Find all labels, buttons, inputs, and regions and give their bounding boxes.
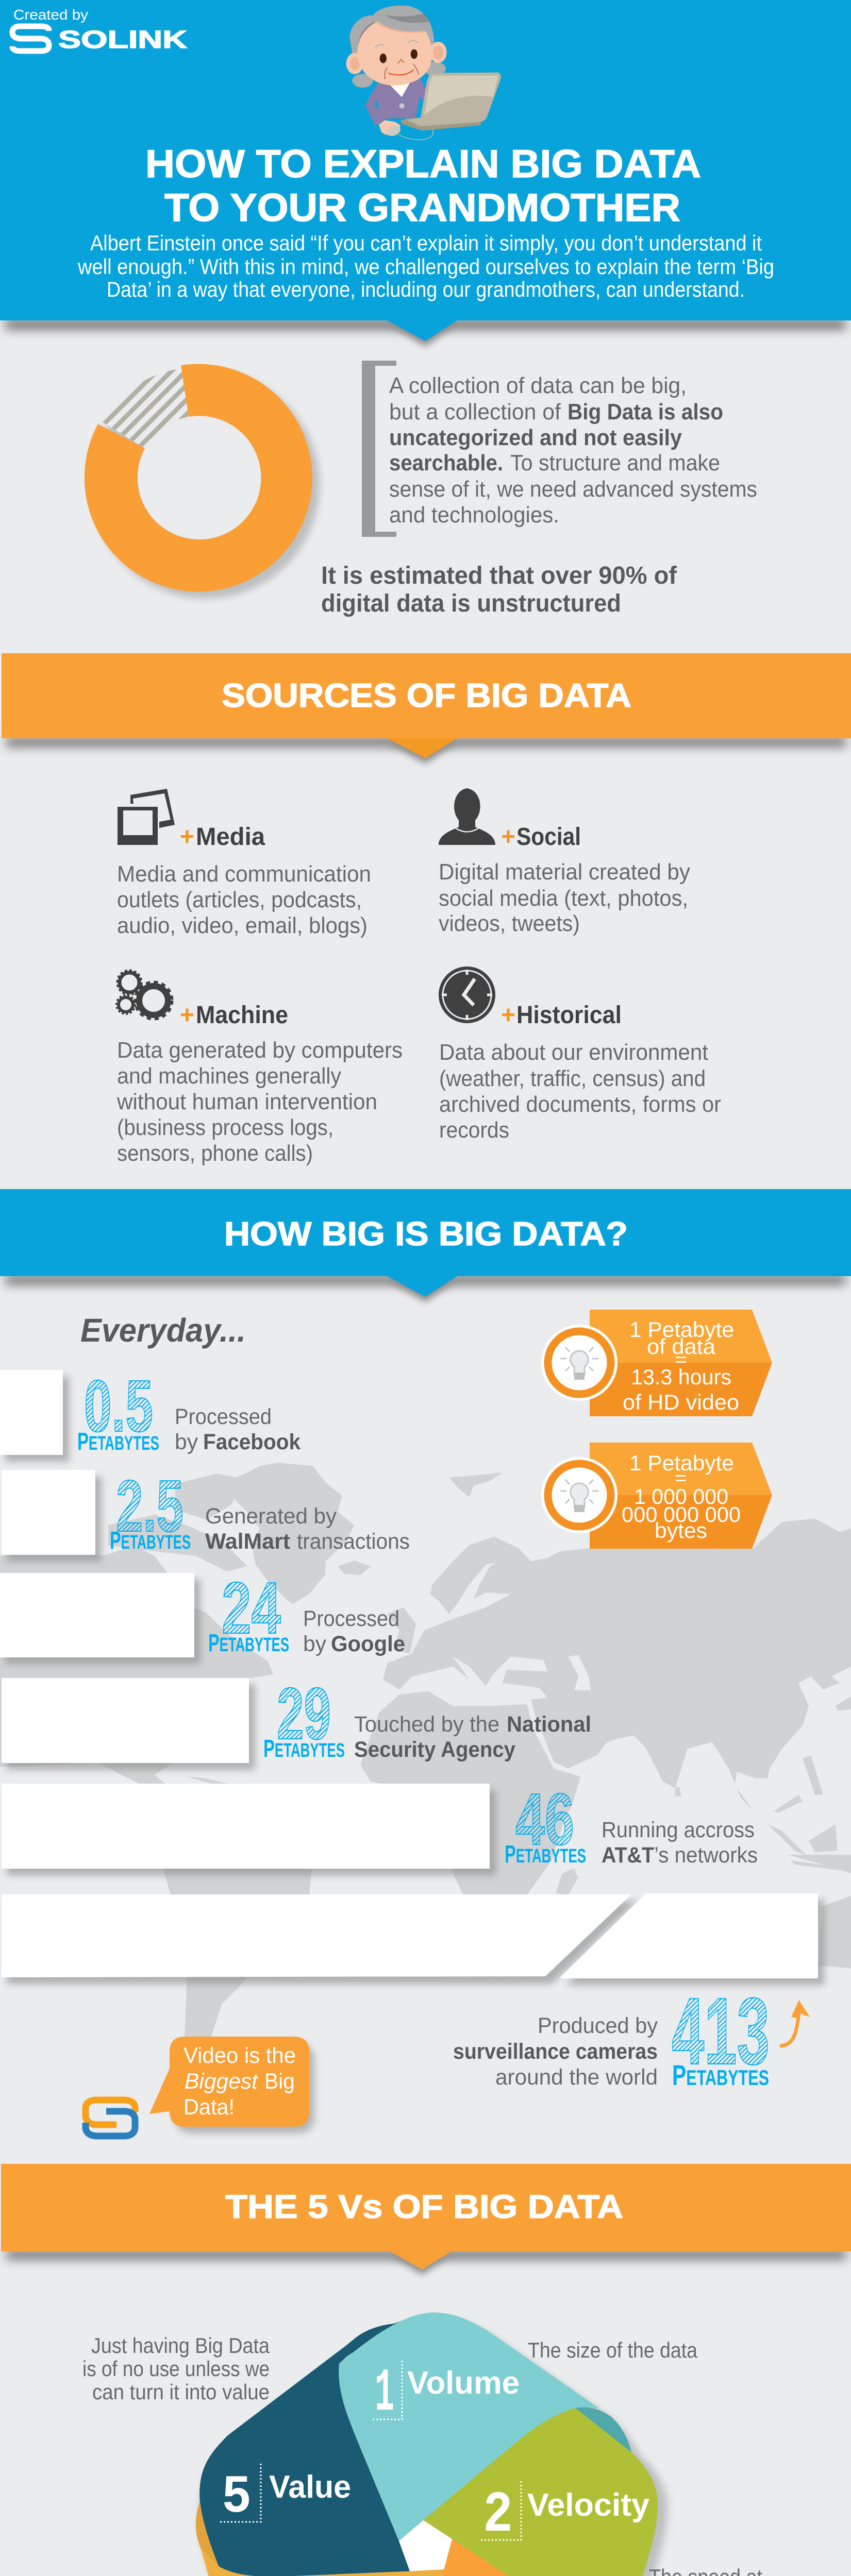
bar: facebook [0,1370,69,1462]
panel: historical [439,967,721,1143]
panel: social [439,788,690,936]
callout: 1 petabyte of data: = [675,1349,687,1370]
heading: historical: + [501,1002,515,1029]
text: nsa [354,1712,591,1762]
callout: video is the biggest big data [149,2037,314,2133]
heading: everyday: Everyday... [80,1312,246,1349]
label: 5 value [220,2464,351,2528]
stat: 413 petabytes [672,1978,770,2091]
text: surveillance cameras: Produced by [538,2013,658,2038]
callout: 1 petabyte of data: 13.3 hours [631,1365,731,1389]
stat: 29 petabytes: 29 [277,1673,331,1755]
panel: sources band [2,653,851,764]
panel: media [117,789,371,938]
text: walmart: transactions [297,1529,410,1554]
text: 90% estimate: digital data is unstructured [321,590,621,617]
stat: 24 petabytes: PETABYTES [208,1630,289,1657]
text: google: Google [331,1632,405,1656]
text: collection of data: searchable. [389,450,503,476]
text: collection of data [389,373,757,528]
icon: light bulb [541,1325,618,1401]
callout: 1 petabyte in bytes: 000 000 000 [622,1502,741,1527]
world map [0,1463,851,2037]
callout: 1 petabyte of data: of HD video [623,1390,739,1414]
callout: video is the biggest big data: Video is the [183,2043,296,2068]
stat: 0.5 petabytes: PETABYTES [77,1428,159,1455]
heading: social: Social [516,823,581,851]
text: machine description: (business process logs, [117,1115,333,1140]
text: nsa: National [507,1712,591,1737]
heading: historical: Historical [516,1002,622,1029]
title: TO YOUR GRANDMOTHER [164,186,680,230]
label: 1 volume: 1 [375,2360,394,2428]
icon: person [439,788,495,845]
text: at&t: AT&T [602,1843,654,1868]
label: 2 velocity: Velocity [527,2487,650,2523]
bar: walmart [2,1470,102,1562]
intro text [77,231,774,301]
text: walmart: WalMart [205,1529,290,1554]
callout: 1 petabyte in bytes [541,1443,772,1549]
label: 5 value: Value [269,2469,351,2505]
text: facebook: by [175,1430,198,1454]
stat: 2.5 petabytes: PETABYTES [110,1527,191,1554]
text: collection of data: Big Data is also [568,399,723,425]
text: google: by [303,1632,326,1656]
text: collection of data: To structure and make [510,450,720,476]
callout: 1 petabyte in bytes: 1 000 000 [634,1484,728,1509]
text: social description: Digital material created by [439,859,690,885]
stat: 0.5 petabytes [77,1365,159,1455]
title [145,142,701,230]
text: machine description: Data generated by computers [117,1038,403,1063]
label: 2 velocity: 2 [483,2483,513,2548]
intro text: well enough.” With this in mind, we challenged ourselves to explain the term ‘Big [77,255,774,279]
text: historical description: archived documents, forms or [439,1092,721,1117]
stat: 24 petabytes [208,1567,289,1657]
text: social description: social media (text, photos, [439,886,688,911]
text: media description: outlets (articles, podcasts, [117,887,362,912]
intro text: Data’ in a way that everyone, including our grandmothers, can understand. [107,277,745,301]
text: google: Processed [303,1606,399,1631]
heading: machine: Machine [196,1002,288,1029]
text: at&t: Running accross [602,1818,755,1842]
logo: Solink: SOLINK [58,26,187,54]
text: collection of data: but a collection of [389,399,561,425]
stat: 413 petabytes: PETABYTES [672,2059,769,2091]
callout: 1 petabyte in bytes: = [675,1467,687,1488]
bar: national security agency [2,1678,255,1770]
text: machine description: and machines generally [117,1063,341,1089]
text: media description: audio, video, email, blogs) [117,913,368,938]
text: google [303,1606,405,1656]
text: collection of data: uncategorized and not easily [389,425,682,450]
text: historical description: Data about our environment [439,1040,708,1065]
callout: video is the biggest big data: Data! [183,2095,235,2120]
stat: 413 petabytes: 413 [672,1978,770,2084]
text: volume description: The size of the data [528,2338,698,2362]
text: historical description: records [439,1117,509,1143]
stat: 46 petabytes: PETABYTES [505,1841,586,1868]
heading: machine: + [180,1002,194,1029]
panel: machine [116,971,403,1166]
stat: 29 petabytes: PETABYTES [263,1735,345,1762]
text: value description: can turn it into value [92,2380,270,2404]
segment: veracity [201,2549,444,2576]
text: nsa: Touched by the [354,1712,499,1737]
donut chart: 90% unstructured [85,364,320,599]
panel: 5 Vs band [1,2164,851,2275]
panel: sources band: SOURCES OF BIG DATA [222,676,631,714]
segment: variety [347,2539,601,2576]
label: 1 volume [371,2360,520,2428]
intro text: Albert Einstein once said “If you can’t explain it simply, you don’t understand it [90,231,762,255]
text: social description [439,859,690,936]
text: surveillance cameras [453,2013,658,2090]
segment: volume [339,2312,600,2541]
text: machine description: sensors, phone calls) [117,1141,313,1166]
text: at&t: ’s networks [654,1843,758,1868]
label: 5 value: 5 [222,2467,252,2528]
text: media description: Media and communication [117,861,371,887]
callout: 1 petabyte of data [541,1310,772,1416]
text: collection of data: and technologies. [389,502,559,528]
icon: clock [439,967,495,1023]
title: HOW TO EXPLAIN BIG DATA [145,142,701,186]
text: value description: Just having Big Data [91,2333,270,2358]
arrow: upward growth [780,2000,810,2046]
stat: 2.5 petabytes: 2.5 [116,1465,183,1547]
bar: surveillance cameras broken bar [2,1893,824,1985]
heading: media: + [180,823,194,851]
text: machine description [116,1038,403,1166]
label: 1 volume: Volume [407,2365,520,2401]
text: nsa: Security Agency [354,1737,515,1762]
panel: 5 Vs band: THE 5 Vs OF BIG DATA [225,2188,623,2225]
icon: gears [116,971,172,1019]
bracket [362,361,396,537]
callout: 1 petabyte in bytes: 1 Petabyte [629,1451,734,1475]
text: historical description: (weather, traffic, census) and [439,1066,706,1091]
text: collection of data: sense of it, we need advanced systems [389,477,757,502]
segment: value [199,2325,410,2576]
bar: google [0,1573,201,1664]
text: machine description: without human intervention [116,1089,377,1114]
text: walmart [205,1504,410,1554]
illustration: grandmother with laptop [346,6,501,140]
panel: header [0,0,851,346]
callout: video is the biggest big data: Big [264,2069,295,2094]
text: facebook: Processed [175,1404,272,1429]
stat: 2.5 petabytes [110,1465,191,1554]
stat: 24 petabytes: 24 [222,1567,281,1649]
text: 90% estimate: It is estimated that over 90% of [321,562,677,589]
logo: Solink: Created by [13,7,88,23]
callout: 1 petabyte in bytes: bytes [655,1518,707,1543]
text: social description: videos, tweets) [439,911,580,936]
text: value description [82,2333,270,2404]
panel: how big band: HOW BIG IS BIG DATA? [224,1215,628,1252]
stat: 29 petabytes [263,1673,345,1762]
logo: Solink [12,7,187,54]
icon: media frames [118,789,175,845]
heading: media: Media [196,823,265,851]
diagram: 5 Vs ring [196,2312,668,2576]
text: historical description [439,1040,721,1143]
text: surveillance cameras: around the world [495,2065,658,2090]
icon: solink mark [86,2100,135,2136]
text: collection of data: A collection of data can be big, [389,373,687,398]
segment: velocity [423,2408,658,2576]
icon: light bulb [541,1457,618,1533]
text: media description [117,861,371,938]
text: walmart: Generated by [205,1504,337,1529]
callout: 1 petabyte of data: of data [647,1334,716,1359]
text: at&t [602,1818,758,1868]
callout: video is the biggest big data: Biggest [185,2069,259,2094]
panel: how big band [0,1189,851,1302]
text: facebook [175,1404,301,1454]
text: value description: is of no use unless we [82,2357,270,2381]
text: 90% estimate [321,562,677,617]
heading: social: + [501,823,515,851]
bar: at&t [2,1784,496,1875]
callout: 1 petabyte of data: 1 Petabyte [629,1317,734,1342]
text: facebook: Facebook [203,1430,301,1454]
stat: 46 petabytes: 46 [515,1778,574,1860]
stat: 0.5 petabytes: 0.5 [84,1365,153,1447]
label: 2 velocity [480,2481,650,2548]
text: surveillance cameras: surveillance cameras [453,2039,658,2064]
